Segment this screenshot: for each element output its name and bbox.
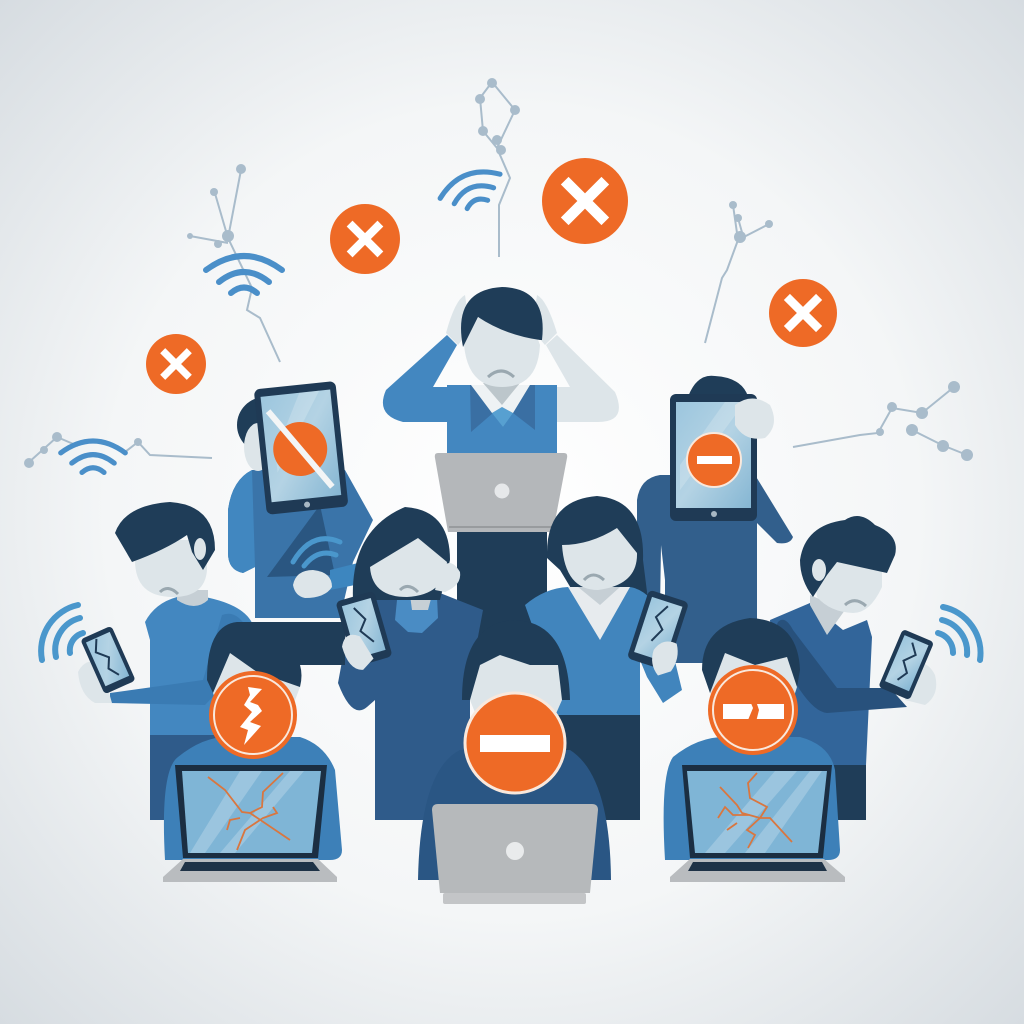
laptop: top centre — [435, 453, 567, 532]
network constellation: left — [24, 432, 212, 468]
person: left with tablet — [228, 397, 373, 618]
icon: wifi far right by phone — [938, 607, 981, 660]
icon: wifi left — [61, 441, 125, 472]
tablet: left with prohibited sign — [254, 381, 348, 515]
network constellation: upper left — [187, 164, 280, 362]
laptop: front centre — [432, 804, 598, 904]
icon: wifi far left by phone — [41, 605, 83, 660]
error icon: large minus badge — [465, 693, 565, 793]
person: centre-right woman — [525, 496, 682, 820]
phone: centre-right cracked — [625, 590, 695, 680]
phone: left cracked — [80, 626, 136, 694]
error icon: large x top — [542, 158, 628, 244]
phone: centre-left cracked — [330, 591, 394, 674]
error icon: x upper left — [330, 204, 400, 274]
laptop: front right cracked — [670, 765, 845, 882]
error icon: cracked minus badge — [708, 665, 798, 755]
person: right with phone — [770, 516, 936, 820]
person: left with phone — [78, 502, 253, 820]
error icon: x right — [769, 279, 837, 347]
person: top centre, hands on head — [383, 287, 619, 640]
tablet: right with minus sign — [670, 394, 774, 521]
phone: right cracked — [878, 629, 934, 700]
person: front left — [164, 622, 345, 860]
person: right with tablet — [637, 376, 793, 663]
laptop: front left cracked — [163, 765, 337, 882]
network constellation: upper right — [705, 201, 773, 343]
person: centre-left woman — [338, 507, 483, 820]
error icon: small x left — [146, 334, 206, 394]
network constellation: right — [793, 381, 973, 461]
network constellation: top centre — [475, 78, 520, 257]
icon: wifi on chest — [293, 539, 340, 566]
person: front centre — [418, 620, 611, 880]
icon: wifi upper left — [206, 256, 282, 293]
error icon: lightning badge — [209, 671, 297, 759]
icon: wifi top centre — [436, 163, 507, 216]
person: front right — [664, 618, 840, 860]
